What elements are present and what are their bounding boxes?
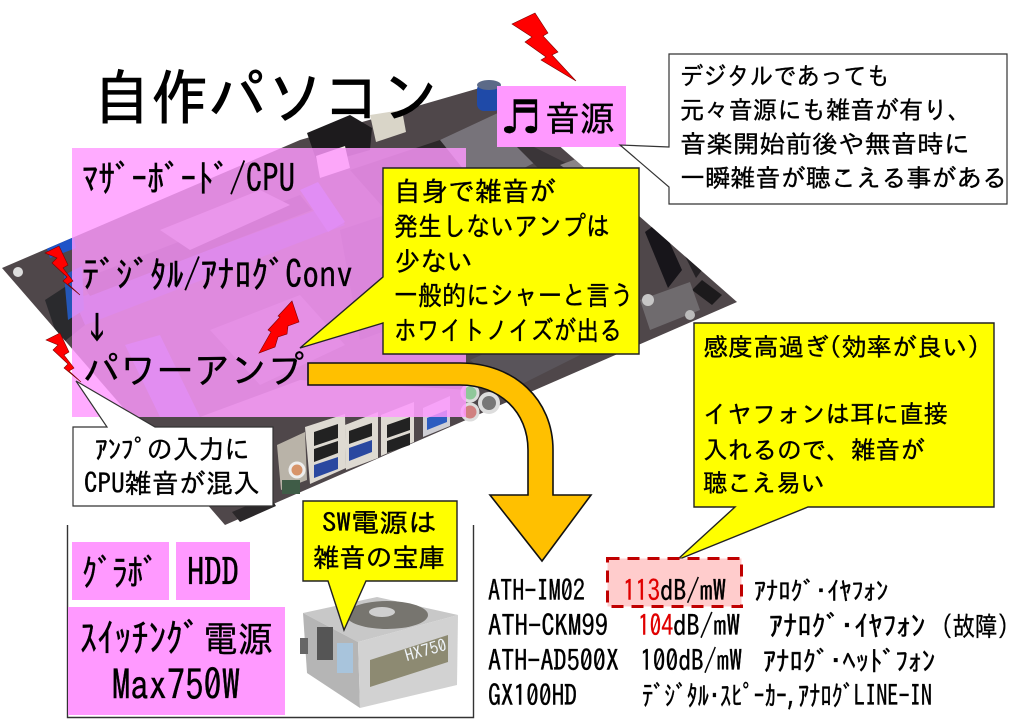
- title: 自作パソコン: [93, 67, 439, 127]
- table row: ATH-AD500X: [488, 646, 935, 675]
- icon: power supply unit: [300, 597, 458, 708]
- text: digital analog converter: ﾃﾞｼﾞﾀﾙ/ｱﾅﾛｸﾞConv: [82, 255, 353, 293]
- table row: GX100HD: ﾃﾞｼﾞﾀﾙ･ｽﾋﾟｰｶｰ,ｱﾅﾛｸﾞLINE-IN: [642, 681, 932, 710]
- panel: sound source label: [497, 86, 626, 147]
- callout: amp noise: 一般的にシャーと言う: [394, 282, 634, 309]
- callout: sensitivity too high: [677, 323, 994, 560]
- callout: amp noise: 少ない: [394, 248, 473, 275]
- label: switching power supply: ｽｲｯﾁﾝｸﾞ: [80, 617, 200, 657]
- rear ports: [232, 385, 498, 522]
- callout: source noise: 一瞬雑音が聴こえる事がある: [680, 166, 1007, 191]
- panel: bottom frame: [68, 525, 474, 718]
- table row: ATH-IM02: ATH-IM02: [488, 576, 585, 605]
- icon: power supply unit: HX750: [403, 637, 449, 665]
- table row: ATH-AD500X: 100dB/mW: [640, 646, 742, 675]
- icon: lightning top: [512, 13, 576, 81]
- callout: CPU noise into amp input: [73, 381, 273, 506]
- arrow: down glyph: ↓: [81, 311, 113, 343]
- table row: ATH-IM02: ｱﾅﾛｸﾞ･ｲﾔﾌｫﾝ: [754, 578, 888, 604]
- table row: ATH-IM02: dB/mW: [660, 576, 726, 605]
- heading: motherboard CPU: ﾏｻﾞｰﾎﾞｰﾄﾞ/CPU: [82, 159, 295, 197]
- highlight: sensitivity value: [608, 558, 742, 606]
- callout: sensitivity too high: 聴こえ易い: [703, 471, 825, 496]
- capacitor: [477, 80, 501, 111]
- table row: ATH-IM02: [488, 576, 888, 605]
- callout: source noise: 音楽開始前後や無音時に: [680, 132, 970, 157]
- motherboard photo: [2, 80, 737, 525]
- label: switching power supply: Max750W: [112, 664, 240, 706]
- callout: sensitivity too high: イヤフォンは耳に直接: [703, 402, 948, 427]
- panel: sound source label: ♬: [500, 90, 541, 144]
- callout: sensitivity too high: 感度高過ぎ(効率が良い): [703, 334, 980, 360]
- table row: ATH-CKM99: ｱﾅﾛｸﾞ･ｲﾔﾌｫﾝ: [769, 611, 925, 640]
- callout: amp noise: ホワイトノイズが出る: [394, 317, 622, 344]
- callout: source noise: [620, 54, 1007, 204]
- table row: ATH-CKM99: 104: [638, 611, 673, 640]
- top connectors: [307, 110, 406, 178]
- icon: lightning left lower: [46, 333, 81, 382]
- callout: source noise: デジタルであっても: [680, 63, 890, 89]
- callout: sensitivity too high: 入れるので、雑音が: [703, 438, 925, 463]
- callout: amp noise: 自身で雑音が: [394, 178, 556, 205]
- arrow: power amp to headphones: [308, 363, 591, 561]
- callout: amp noise: [300, 168, 639, 354]
- table row: ATH-CKM99: dB/mW: [673, 611, 740, 640]
- callout: switching supply noise: SW電源は: [322, 510, 437, 536]
- table row: ATH-CKM99: ATH-CKM99: [488, 611, 608, 640]
- panel: sound source label: 音源: [545, 101, 615, 136]
- label: graphics card: ｸﾞﾗﾎﾞ: [82, 553, 158, 591]
- callout: CPU noise into amp input: CPU雑音が混入: [84, 470, 260, 497]
- panel: motherboard / CPU translucent overlay: [72, 148, 466, 417]
- table row: ATH-AD500X: ｱﾅﾛｸﾞ･ﾍｯﾄﾞﾌｫﾝ: [763, 647, 935, 675]
- text: power amp: パワーアンプ: [83, 351, 304, 389]
- table row: ATH-AD500X: ATH-AD500X: [488, 646, 619, 675]
- callout: CPU noise into amp input: ｱﾝﾌﾟの入力に: [95, 436, 250, 463]
- table row: GX100HD: GX100HD: [488, 681, 577, 710]
- label: graphics card: [72, 542, 169, 600]
- callout: switching supply noise: 雑音の宝庫: [313, 545, 445, 571]
- icon: lightning center: [259, 301, 299, 353]
- callout: amp noise: 発生しないアンプは: [394, 212, 610, 240]
- table row: ATH-IM02: 113: [623, 576, 660, 605]
- table row: ATH-CKM99: [488, 611, 1020, 640]
- label: switching power supply: [68, 607, 285, 715]
- table row: GX100HD: [488, 681, 932, 710]
- label: HDD: [176, 542, 250, 600]
- callout: source noise: 元々音源にも雑音が有り、: [680, 98, 972, 123]
- label: switching power supply: 電源: [203, 621, 273, 657]
- callout: switching supply noise: [303, 501, 457, 630]
- label: HDD: HDD: [187, 553, 239, 591]
- icon: lightning left upper: [45, 246, 80, 295]
